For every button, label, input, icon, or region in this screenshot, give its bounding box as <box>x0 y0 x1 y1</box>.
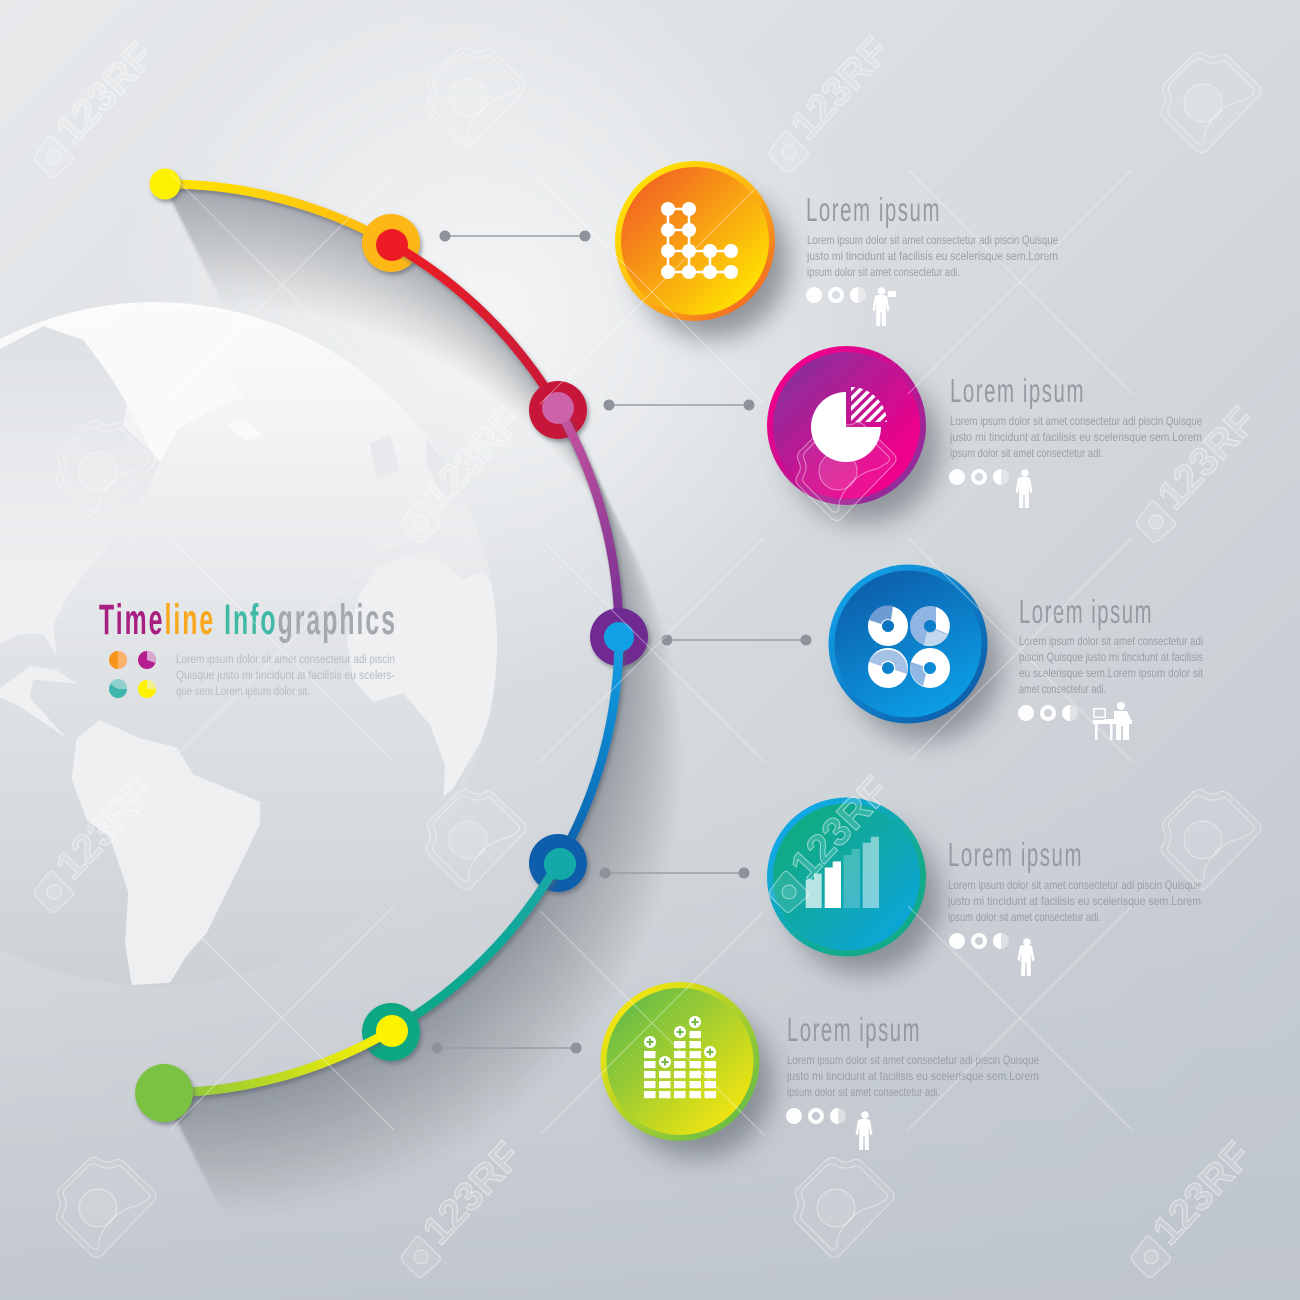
text: step 2: justo mi tincidunt at facilisis eu scelerisque sem.Lorem <box>949 430 1202 444</box>
watermark logos: 123RF <box>1149 399 1265 518</box>
rating and person: step 5 <box>786 1108 872 1150</box>
panel: step 1 <box>615 161 788 338</box>
text: step 5 <box>786 1011 1039 1099</box>
watermark logos: 123RF <box>47 769 163 888</box>
watermark logos: 123RF <box>1144 1134 1260 1253</box>
timeline arc <box>135 168 648 1122</box>
text: step 5: Lorem ipsum dolor sit amet consectetur adi piscin Quisque <box>787 1053 1039 1067</box>
text: step 2: Lorem ipsum dolor sit amet consectetur adi piscin Quisque <box>950 414 1202 428</box>
text: step 3: Lorem ipsum <box>1019 593 1153 630</box>
rating and person: step 1 <box>806 287 896 326</box>
connector lines <box>432 230 812 1054</box>
start dot <box>150 168 180 200</box>
icon: bar chart <box>806 837 879 908</box>
text: step 1: justo mi tincidunt at facilisis eu scelerisque sem.Lorem <box>806 249 1058 263</box>
text: step 1 <box>806 191 1058 279</box>
text: step 4: Lorem ipsum dolor sit amet consectetur adi piscin Quisque <box>948 878 1201 892</box>
title description <box>176 654 395 698</box>
text: step 4: justo mi tincidunt at facilisis eu scelerisque sem.Lorem <box>947 894 1201 908</box>
watermark logos: 123RF <box>782 769 898 888</box>
watermark logos: 123RF <box>47 34 163 153</box>
text: step 5: Lorem ipsum <box>787 1011 921 1048</box>
text: step 1: Lorem ipsum <box>806 191 941 228</box>
text: step 3: piscin Quisque justo mi tincidunt at facilisis <box>1019 650 1203 664</box>
title description: Lorem ipsum dolor sit amet consectetur adi piscin <box>176 654 395 666</box>
panel: step 4 <box>767 798 940 974</box>
title description: Quisque justo mi tincidunt at facilisis eu scelers- <box>176 670 395 682</box>
rating and person: step 2 <box>949 469 1032 508</box>
continents <box>0 304 513 985</box>
end dot <box>135 1064 193 1122</box>
globe <box>0 302 513 986</box>
text: step 2: ipsum dolor sit amet consectetur adi. <box>950 446 1103 460</box>
text: step 5: ipsum dolor sit amet consectetur adi. <box>787 1085 940 1099</box>
text: step 3: amet consectetur adi. <box>1019 682 1106 696</box>
rating and desk person: step 3 <box>1018 702 1132 740</box>
rating and person: step 4 <box>949 933 1034 976</box>
text: step 4: Lorem ipsum <box>948 836 1083 873</box>
text: step 5: justo mi tincidunt at facilisis eu scelerisque sem.Lorem <box>786 1069 1039 1083</box>
text: step 4: ipsum dolor sit amet consectetur adi. <box>948 910 1101 924</box>
text: step 3: eu scelerisque sem.Lorem ipsum dolor sit <box>1019 666 1204 680</box>
text: step 1: Lorem ipsum dolor sit amet consectetur adi piscin Quisque <box>807 233 1058 247</box>
panel: step 2 <box>767 346 940 523</box>
watermark logos: 123RF <box>414 1134 530 1253</box>
text: step 2 <box>949 372 1202 460</box>
icon: stacked equalizer <box>644 1016 716 1098</box>
icon: pie chart <box>811 387 887 462</box>
icon: network dots <box>661 202 738 279</box>
watermark logos: 123RF <box>414 399 530 518</box>
text: step 3: Lorem ipsum dolor sit amet consectetur adi <box>1019 634 1203 648</box>
icon: four donut charts <box>869 605 950 686</box>
title: Timeline Infographics <box>99 596 397 644</box>
text: step 4 <box>947 836 1201 924</box>
text: step 2: Lorem ipsum <box>950 372 1085 409</box>
panel: step 3 <box>828 564 1001 741</box>
watermark logos: 123RF <box>782 29 898 148</box>
legend dots <box>109 651 156 698</box>
text: step 1: ipsum dolor sit amet consectetur adi. <box>807 265 960 279</box>
title description: que sem.Lorem ipsum dolor sit. <box>176 686 310 698</box>
panel: step 5 <box>600 982 773 1158</box>
text: step 3 <box>1019 593 1204 696</box>
